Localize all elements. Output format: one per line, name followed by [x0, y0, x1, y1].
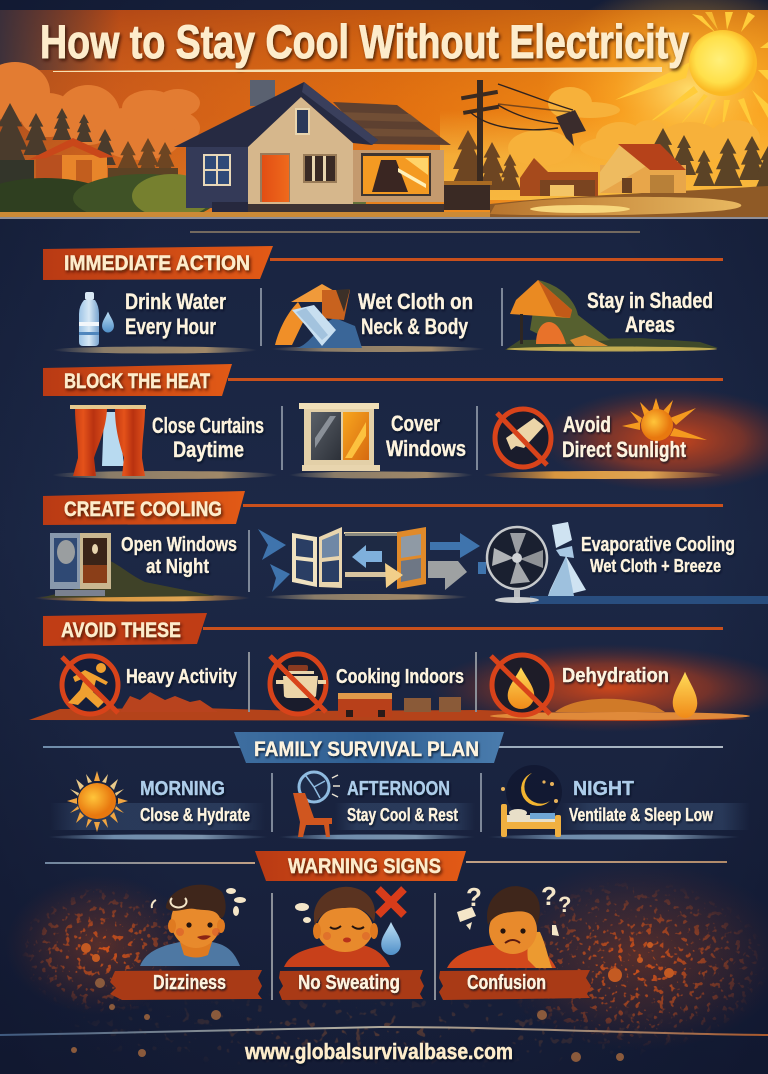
- icon: golden drop: [673, 672, 697, 718]
- label ribbon: confusion: [439, 970, 591, 1000]
- item: shaded areas: Areas: [625, 312, 675, 337]
- item: night: NIGHT: [573, 778, 634, 800]
- icon: no hand in sun: [495, 409, 551, 467]
- panel: immediate action: [43, 246, 723, 354]
- shed: [28, 138, 114, 188]
- item: morning: MORNING: [140, 778, 225, 800]
- heading: warning signs: [45, 851, 727, 881]
- utility pole with broken wires: [444, 80, 586, 210]
- heading: create cooling: [43, 491, 723, 525]
- footer url: www.globalsurvivalbase.com: [244, 1039, 513, 1064]
- item: wet cloth: Neck & Body: [361, 314, 469, 339]
- header lower rule: [190, 231, 640, 233]
- item: shaded areas: [505, 280, 718, 352]
- item: evaporative cooling: [478, 522, 768, 604]
- item: evaporative cooling: Wet Cloth + Breeze: [590, 556, 721, 576]
- panel: warning signs: [45, 851, 727, 1000]
- heading: create cooling: CREATE COOLING: [64, 498, 222, 521]
- icon: sun: [622, 398, 707, 441]
- heading: block the heat: [43, 364, 723, 396]
- item: cover windows: Cover: [391, 411, 440, 436]
- item: night: Ventilate & Sleep Low: [569, 805, 714, 825]
- item: morning: Close & Hydrate: [140, 805, 250, 825]
- heading: immediate action: [43, 246, 723, 280]
- footer curve: [0, 1027, 768, 1035]
- item: wet cloth: Wet Cloth on: [358, 289, 473, 314]
- item: close curtains: [52, 405, 278, 479]
- label ribbon: dizziness: Dizziness: [153, 972, 226, 994]
- item: dehydration: Dehydration: [562, 665, 669, 687]
- heading: block the heat: BLOCK THE HEAT: [64, 370, 210, 393]
- trees: [0, 103, 768, 218]
- title underline: [53, 67, 662, 72]
- ground strip: [29, 708, 750, 721]
- house: [174, 80, 451, 212]
- item: open windows at night: [34, 533, 250, 602]
- arrow: indoor airflow: [345, 545, 467, 590]
- road: [0, 186, 768, 219]
- item: night: [488, 765, 750, 840]
- item: heavy activity: Heavy Activity: [126, 666, 238, 688]
- label ribbon: confusion: Confusion: [467, 972, 546, 994]
- item: afternoon: AFTERNOON: [347, 778, 450, 800]
- heading: family survival plan: [43, 732, 723, 763]
- bushes: [0, 174, 366, 212]
- item: cooking indoors: [270, 654, 464, 717]
- heading: family survival plan: FAMILY SURVIVAL PLAN: [254, 738, 479, 761]
- item: no sweating: [279, 887, 424, 1000]
- item: drink water: [53, 289, 257, 354]
- label ribbon: no sweating: [279, 970, 424, 1000]
- item: close curtains: Close Curtains: [152, 413, 264, 438]
- icon: confused boy: ?: [558, 892, 571, 917]
- panel: avoid these: [29, 613, 750, 721]
- panel: family survival plan: [43, 732, 750, 840]
- icon: confused boy: ?: [541, 881, 557, 911]
- item: open windows at night: at Night: [146, 556, 209, 578]
- header illustration: sunset scene: [0, 0, 768, 230]
- panel: block the heat: [43, 364, 723, 479]
- item: cooking indoors: Cooking Indoors: [336, 666, 464, 688]
- icon: no running: [62, 656, 118, 714]
- item: cover windows: [289, 403, 473, 478]
- item: close curtains: Daytime: [173, 437, 244, 462]
- item: open windows at night: Open Windows: [121, 534, 237, 556]
- clouds: [0, 62, 760, 166]
- icon: fan: [478, 527, 547, 603]
- item: cover windows: Windows: [386, 436, 466, 461]
- glow behind avoid row: [430, 644, 768, 732]
- item: dehydration: [491, 655, 697, 718]
- heading: avoid these: [43, 613, 723, 646]
- heading: avoid these: AVOID THESE: [61, 619, 181, 642]
- label ribbon: no sweating: No Sweating: [298, 972, 400, 994]
- item: afternoon: Stay Cool & Rest: [347, 805, 458, 825]
- item: drink water: Drink Water: [125, 289, 226, 314]
- icon: confused boy: [447, 881, 571, 968]
- item: dizziness: [110, 885, 262, 1000]
- item: shaded areas: Stay in Shaded: [587, 288, 713, 313]
- icon: cross-ventilation window and airflow arrows: [258, 527, 480, 600]
- item: avoid direct sunlight: [483, 398, 723, 479]
- item: drink water: Every Hour: [125, 314, 216, 339]
- heading: immediate action: IMMEDIATE ACTION: [64, 252, 250, 275]
- heading: warning signs: WARNING SIGNS: [288, 855, 441, 878]
- item: heavy activity: [62, 656, 238, 714]
- item: wet cloth: [271, 284, 485, 352]
- icon: sun with rays: [615, 12, 768, 135]
- arrow: incoming air: [258, 529, 480, 592]
- item: avoid direct sunlight: Direct Sunlight: [562, 437, 687, 462]
- icon: dizzy boy: [140, 885, 246, 966]
- item: avoid direct sunlight: Avoid: [563, 412, 611, 437]
- neighbouring houses: [520, 144, 686, 196]
- icon: confused boy: ?: [466, 882, 482, 912]
- item: afternoon: [279, 772, 475, 840]
- item: confusion: [439, 881, 591, 1000]
- icon: no water drop: [491, 655, 552, 715]
- label ribbon: dizziness: [110, 970, 262, 1000]
- speckled embers backdrop: [5, 860, 768, 1070]
- item: morning: [48, 771, 268, 840]
- icon: no cooking pot: [270, 654, 326, 714]
- icon: tired boy: [284, 887, 404, 967]
- icon: wet cloth: [548, 522, 586, 596]
- glow behind avoid direct sunlight: [542, 388, 768, 492]
- panel: create cooling: [34, 491, 768, 604]
